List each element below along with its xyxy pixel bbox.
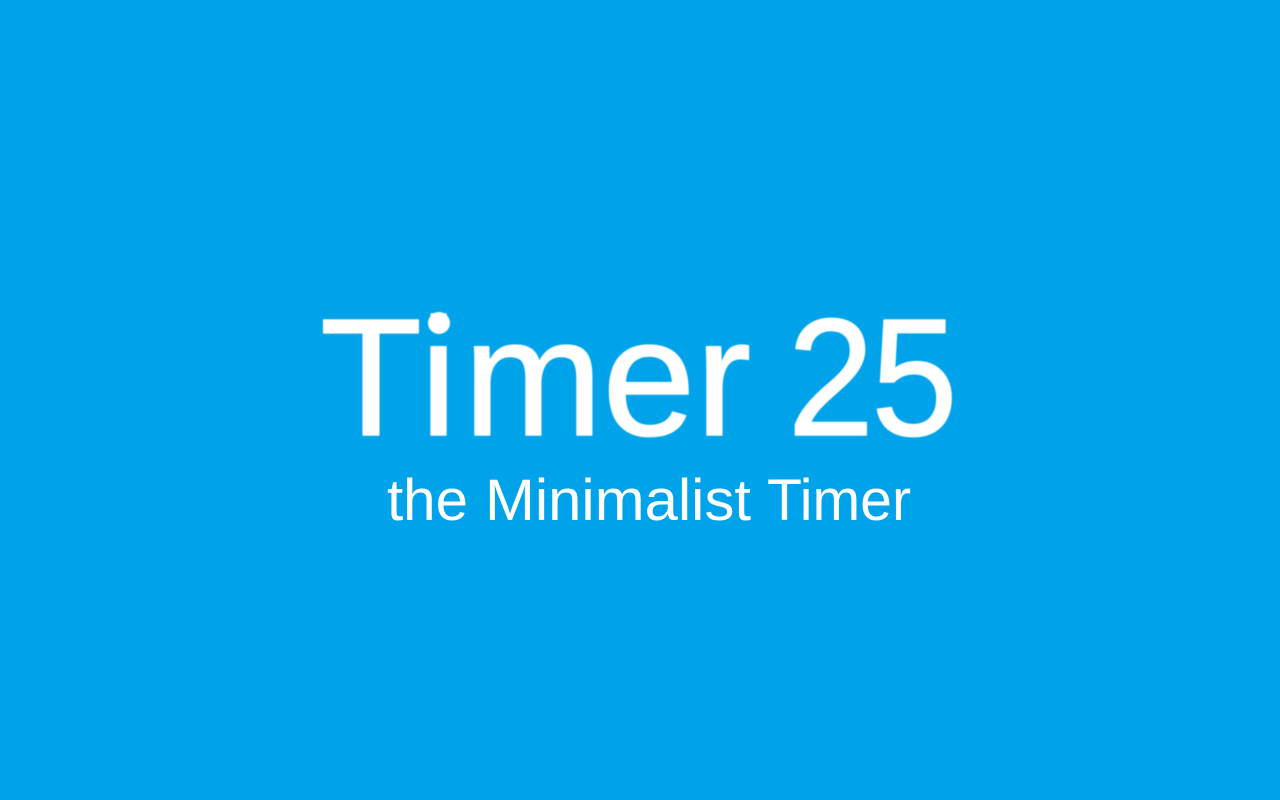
title: Timer 25: 25 xyxy=(788,285,958,471)
subtitle: the Minimalist Timer: Minimalist xyxy=(485,468,751,533)
title: Timer 25: Timer xyxy=(320,285,751,471)
subtitle: the Minimalist Timer: Timer xyxy=(767,468,911,533)
subtitle: the Minimalist Timer xyxy=(387,468,911,533)
title: Timer 25 xyxy=(320,285,958,471)
subtitle: the Minimalist Timer: the xyxy=(387,468,468,533)
